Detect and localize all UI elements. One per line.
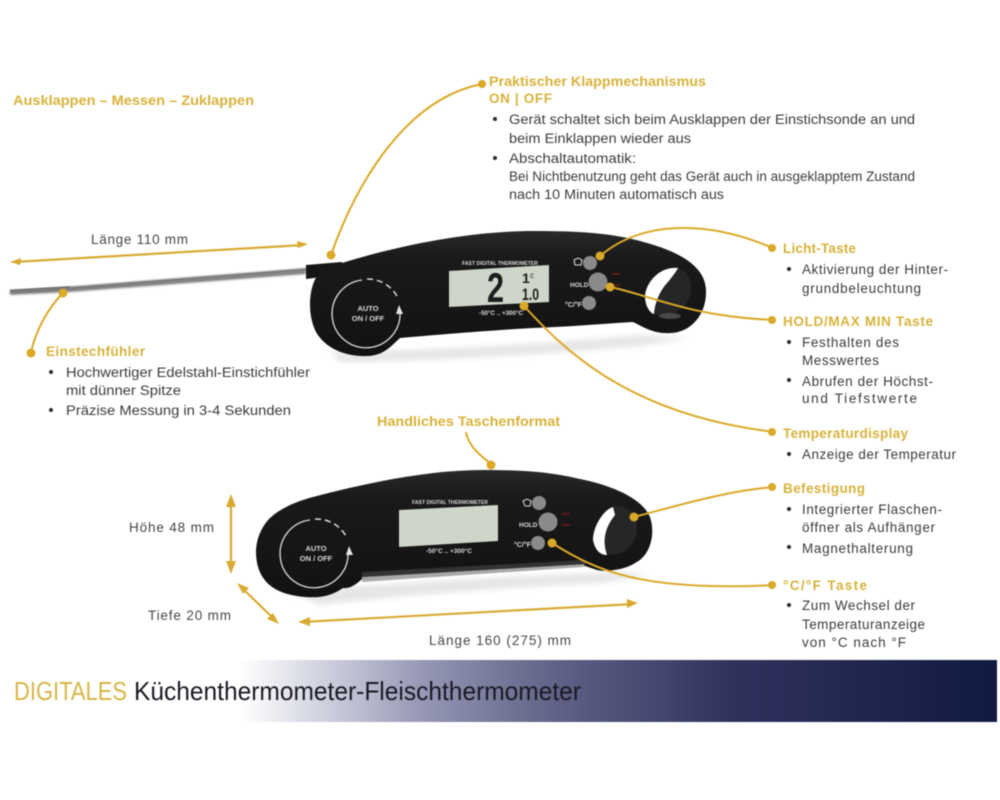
buttons: °C/°F (514, 541, 532, 549)
connector: Klappmechanismus (326, 80, 486, 260)
folded probe (362, 564, 585, 582)
bullet list: Abschaltautomatik: (509, 151, 636, 166)
bullet list: Temperaturanzeige (802, 617, 925, 632)
panel: Befestigung (783, 481, 942, 556)
buttons (565, 256, 620, 310)
dimension arrow: Tiefe 20 mm (237, 583, 279, 624)
bottle opener hole (593, 506, 637, 555)
brand label: FAST DIGITAL THERMOMETER (462, 261, 538, 267)
heading: Temperaturdisplay: Temperaturdisplay (783, 426, 908, 441)
display: 2 (487, 264, 504, 311)
heading: Ausklappen Messen Zuklappen: Ausklappen – Messen – Zuklappen (13, 93, 254, 108)
thermometer: unfolded with probe (10, 231, 706, 362)
drop shadow (290, 572, 650, 605)
bullet list: von °C nach °F (802, 635, 906, 650)
dial: auto on/off: AUTO (305, 544, 327, 553)
temperature range: -50°C .. +300°C (479, 311, 524, 317)
bullet list: grundbeleuchtung (802, 281, 921, 296)
buttons: °C/°F (565, 301, 583, 309)
dimension label: Länge 110 mm: Länge 110 mm (91, 232, 188, 247)
bottle opener hole (645, 268, 691, 319)
bullet list: Aktivierung der Hinter- (802, 262, 948, 277)
panel: Temperaturdisplay (783, 426, 956, 462)
display: c (530, 271, 534, 280)
heading: HOLD/MAX MIN Taste: HOLD/MAX MIN Taste (783, 314, 933, 329)
banner (14, 660, 997, 722)
bullet list (787, 262, 948, 296)
connector: HOLD/MAX MIN (606, 282, 776, 324)
bullet list: Festhalten des (802, 335, 899, 350)
connector: Temperaturdisplay (520, 302, 776, 436)
bullet list: beim Einklappen wieder aus (509, 131, 691, 146)
connector: Handliches Taschenformat (466, 433, 496, 470)
bullet list: Abrufen der Höchst- (802, 374, 933, 389)
bullet list: Hochwertiger Edelstahl-Einstichfühler (66, 365, 311, 380)
gradient bar (240, 660, 997, 722)
buttons: HOLD (519, 522, 538, 529)
bullet list: Integrierter Flaschen- (802, 502, 942, 517)
dimension arrow: Höhe 48 mm (226, 494, 236, 574)
bullet list: Bei Nichtbenutzung geht das Gerät auch in ausgeklapptem Zustand (509, 169, 915, 184)
heading: °C/°F Taste: °C/°F Taste (783, 578, 867, 593)
bullet list: mit dünner Spitze (66, 383, 181, 398)
connector: Licht-Taste (596, 228, 776, 260)
bullet list: Anzeige der Temperatur (802, 447, 956, 462)
banner title gold: DIGITALES (14, 676, 127, 706)
body (256, 470, 652, 597)
dial: auto on/off: AUTO (357, 304, 379, 313)
heading: Befestigung: Befestigung (783, 481, 865, 496)
bullet list (787, 598, 925, 650)
bullet list (493, 112, 915, 202)
probe hub (306, 262, 345, 279)
dimension label: Höhe 48 mm: Höhe 48 mm (129, 520, 214, 535)
display: 1 (522, 270, 530, 286)
bullet list: Zum Wechsel der (802, 598, 916, 613)
display (449, 264, 549, 311)
thermometer: folded (256, 470, 652, 605)
temperature range: -50°C .. +300°C (426, 549, 473, 555)
dimension label: Tiefe 20 mm: Tiefe 20 mm (148, 608, 231, 623)
drop shadow (330, 335, 690, 362)
heading: Handliches Taschenformat: Handliches Taschenformat (377, 414, 561, 429)
display (399, 505, 498, 547)
heading: Licht-Taste: Licht-Taste (783, 241, 856, 256)
brand label: FAST DIGITAL THERMOMETER (412, 500, 488, 506)
dial: auto on/off (332, 279, 403, 348)
panel: HOLD/MAX MIN Taste (783, 314, 933, 406)
dial: auto on/off (280, 519, 353, 588)
buttons (514, 496, 570, 550)
dial: auto on/off: ON / OFF (352, 314, 385, 323)
dimension arrow: Länge 160 mm (298, 599, 638, 626)
heading: Praktischer Klappmechanismus: Praktischer Klappmechanismus (489, 74, 706, 89)
connector: Einstechfühler (26, 288, 68, 358)
subheading: ON OFF: ON | OFF (489, 91, 552, 106)
connector: Befestigung (630, 483, 776, 522)
banner title black: Küchenthermometer-Fleischthermometer (134, 676, 581, 706)
bullet list: Präzise Messung in 3-4 Sekunden (66, 403, 291, 418)
display: 1.0 (522, 285, 539, 304)
bullet list: öffner als Aufhänger (802, 520, 936, 535)
body (310, 231, 706, 356)
panel: °C/°F Taste (783, 578, 925, 650)
panel: Licht-Taste (783, 241, 948, 296)
panel: Klappmechanismus (489, 74, 915, 202)
bullet list (49, 365, 311, 418)
dimension arrow: Länge 110 mm (10, 241, 308, 265)
bullet list (787, 335, 933, 406)
heading: Einstechfühler: Einstechfühler (46, 344, 146, 359)
bullet list (787, 502, 942, 556)
panel: Einstechfühler (46, 344, 311, 418)
dimension label: Länge 160 (275) mm: Länge 160 (275) mm (429, 633, 571, 648)
bullet list: Magnethalterung (802, 541, 913, 556)
connector: °C/°F Taste (548, 538, 776, 589)
bullet list: nach 10 Minuten automatisch aus (509, 187, 724, 202)
bullet list: Messwertes (802, 353, 879, 368)
dial: auto on/off: ON / OFF (300, 554, 333, 563)
buttons: HOLD (570, 282, 589, 289)
bullet list: und Tiefstwerte (802, 391, 917, 406)
bullet list: Gerät schaltet sich beim Ausklappen der Einstichsonde an und (509, 112, 915, 127)
probe (10, 268, 306, 293)
